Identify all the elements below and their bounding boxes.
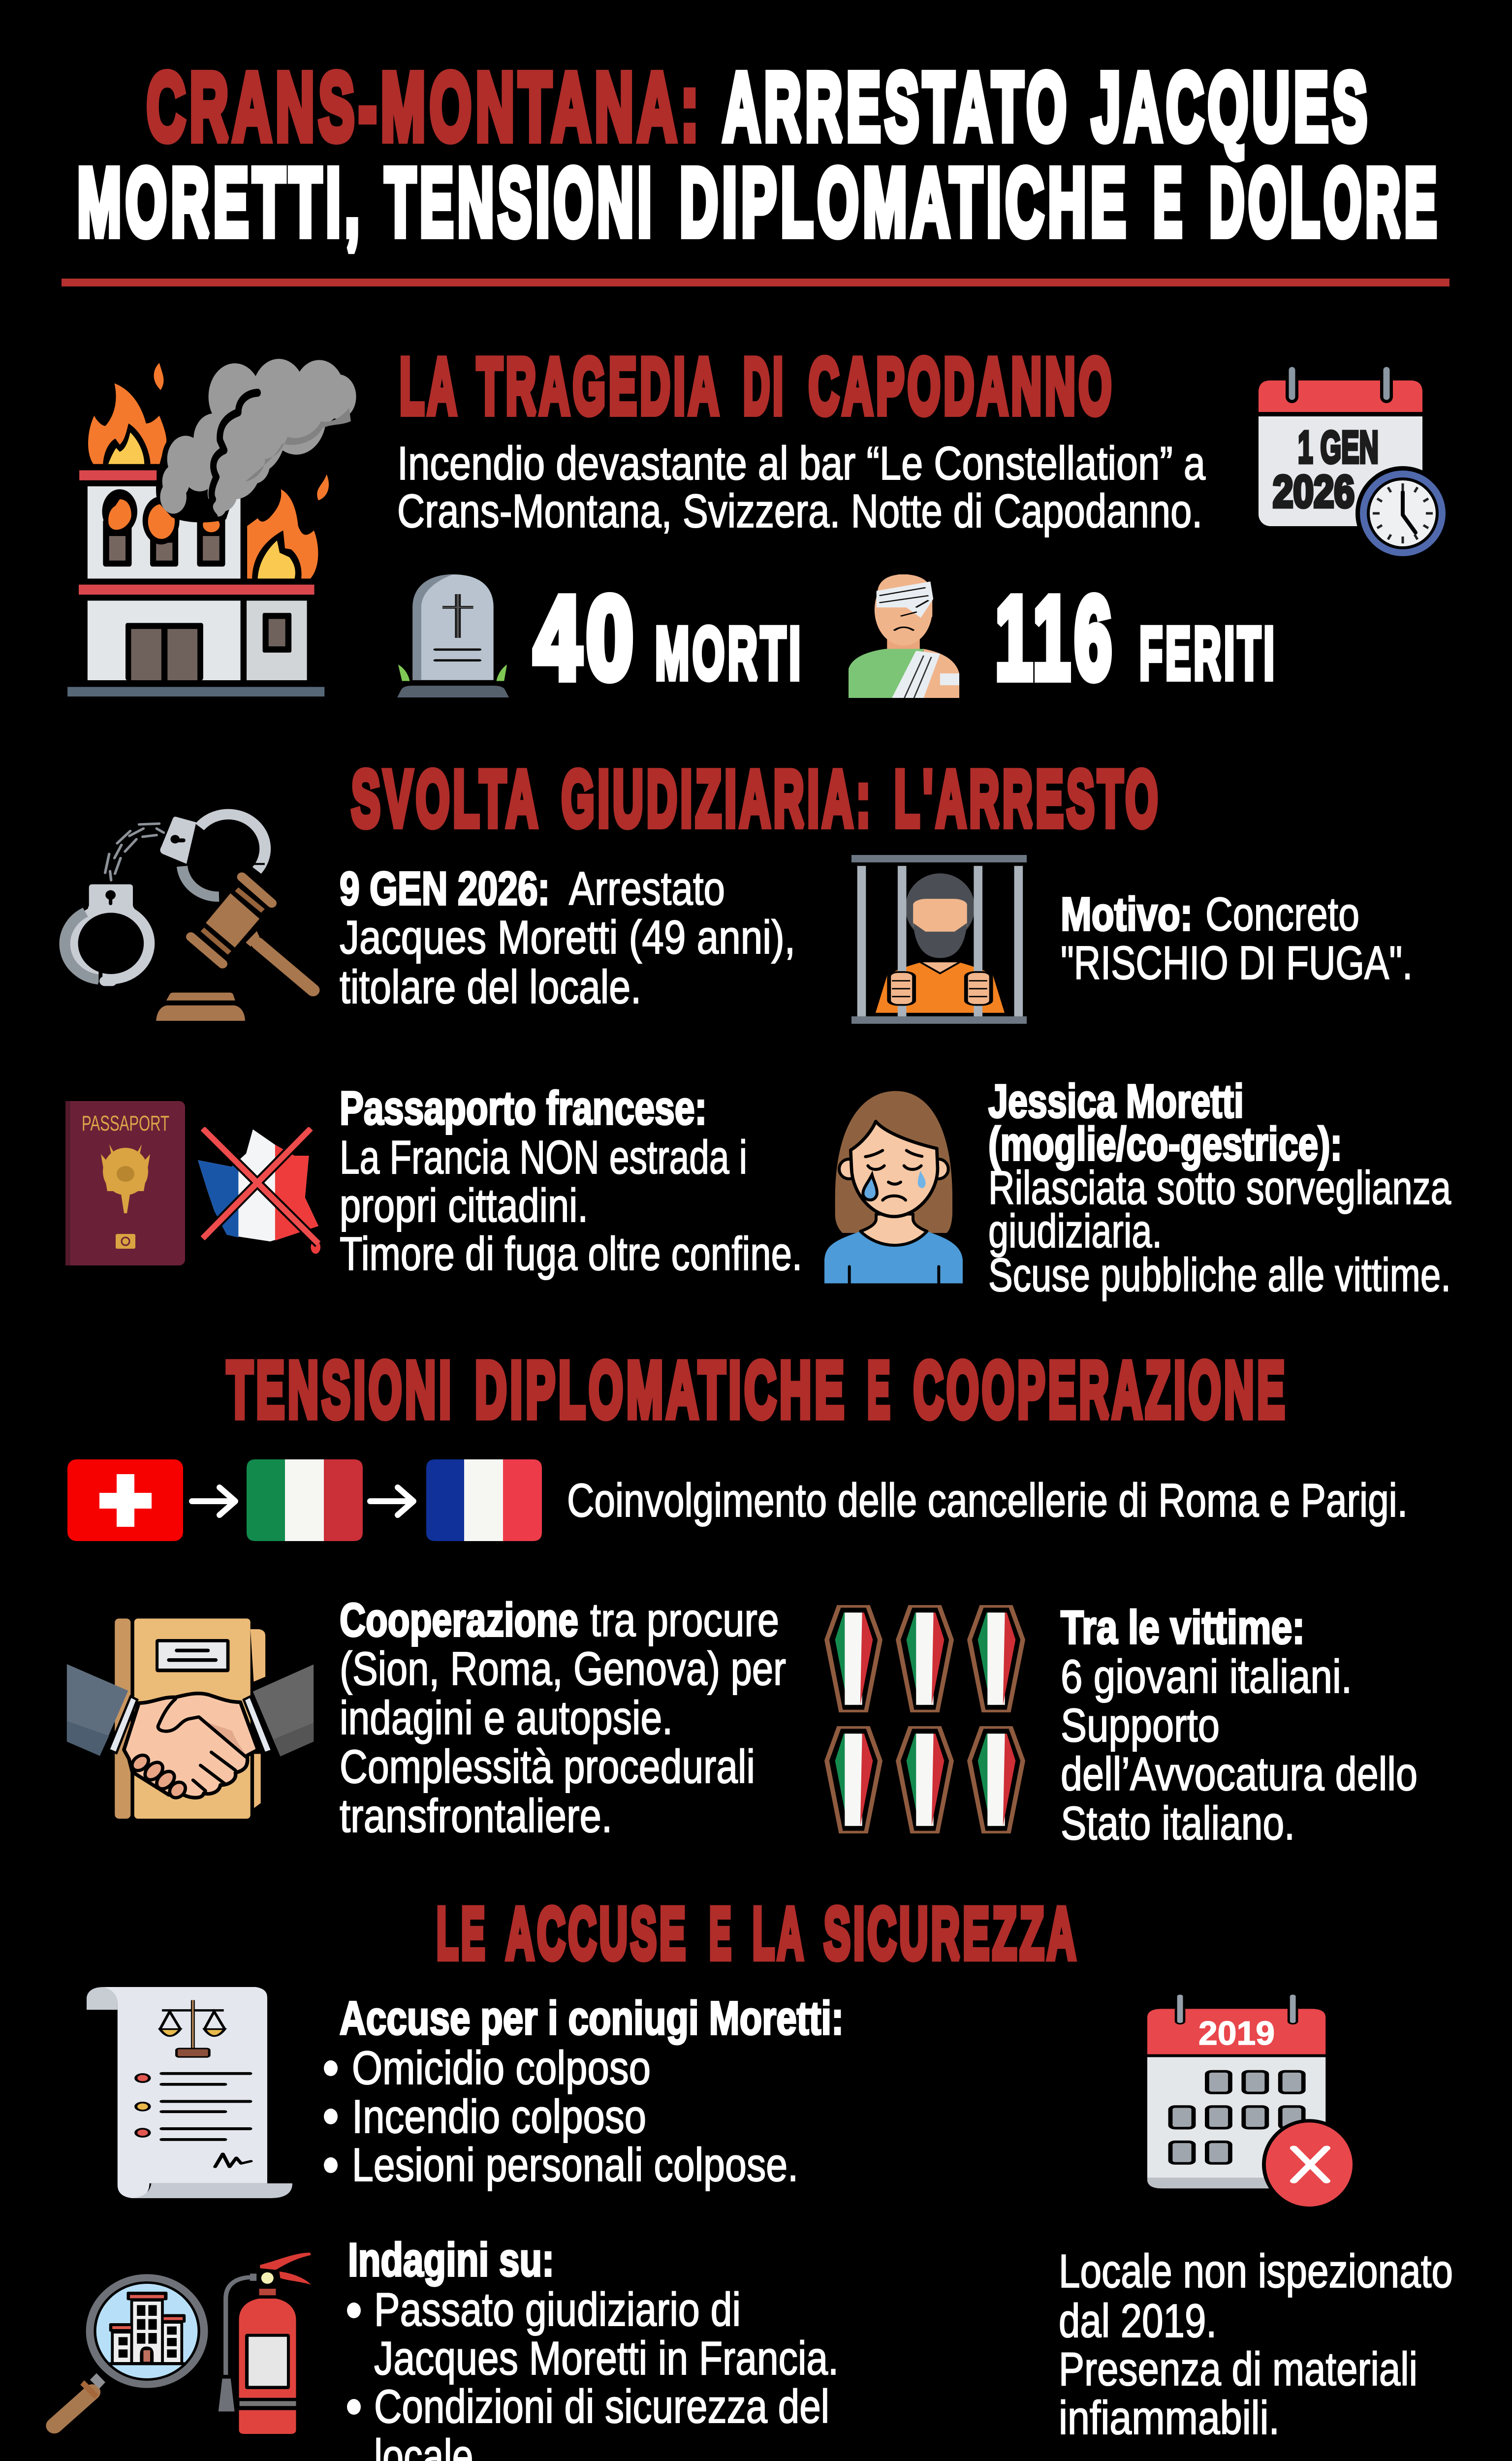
text block: tra le vittime: dell’Avvocatura dello [1061, 1748, 1418, 1800]
text block: arresto: Jacques Moretti (49 anni), [340, 911, 795, 964]
panel: tensioni diplomatiche [67, 1346, 1418, 1850]
text block: locale non ispezionato: dal 2019. [1059, 2295, 1217, 2347]
text block: accuse: Incendio colposo [352, 2090, 646, 2143]
text block: indagini [347, 2234, 839, 2461]
text block: accuse: Lesioni personali colpose. [352, 2139, 798, 2191]
text block: indagini: Jacques Moretti in Francia. [374, 2332, 839, 2385]
text block: cooperazione: indagini e autopsie. [340, 1692, 673, 1744]
text block: jessica moretti: giudiziaria. [988, 1205, 1162, 1258]
title: TENSIONI [385, 149, 656, 256]
text block: indagini: Indagini su: [348, 2234, 554, 2286]
icon: six coffins with italian flag [824, 1605, 1025, 1833]
title: MORETTI, [77, 149, 364, 256]
icon: injured person [849, 574, 959, 698]
icon: handshake over folder [67, 1618, 314, 1819]
text block: passaporto francese [340, 1082, 802, 1280]
icon: fire extinguisher [219, 2252, 311, 2434]
heading: CAPODANNO [809, 342, 1115, 431]
text block: tra le vittime [1061, 1601, 1418, 1850]
text block: cooperazione: transfrontaliere. [340, 1790, 612, 1842]
heading: E [867, 1346, 893, 1434]
title: E [1153, 149, 1186, 256]
heading [437, 1893, 1079, 1974]
heading: SICUREZZA [824, 1893, 1079, 1974]
text block: cooperazione: Cooperazione [340, 1594, 578, 1646]
icon: swiss flag [67, 1459, 183, 1541]
icon: crossed out france map [198, 1127, 321, 1254]
text block: locale non ispezionato: infiammabili. [1059, 2392, 1280, 2444]
text block: accuse [324, 1992, 844, 2191]
heading: GIUDIZIARIA: [562, 755, 874, 843]
icon: man in jail [851, 855, 1027, 1024]
stat: 40 morti: MORTI [655, 612, 804, 694]
heading: DIPLOMATICHE [475, 1346, 848, 1434]
panel: la tragedia di capodanno [67, 342, 1450, 703]
title [77, 53, 1441, 256]
heading [400, 342, 1115, 431]
text block: arresto: 9 GEN 2026: [340, 862, 550, 915]
text block: cooperazione: (Sion, Roma, Genova) per [340, 1642, 786, 1695]
stat: 40 morti [534, 573, 804, 703]
heading: DI [743, 342, 786, 431]
text block: incendio [397, 437, 1206, 537]
heading [227, 1346, 1288, 1434]
heading: LA [753, 1893, 806, 1974]
text block: incendio: Crans-Montana, Svizzera. Notte di Capodanno. [397, 485, 1202, 537]
title: CRANS-MONTANA: [147, 53, 703, 160]
text block: arresto: titolare del locale. [340, 961, 641, 1013]
icon: calendar 2019 with red x: 2019 [1198, 2015, 1275, 2052]
stat: 116 feriti: 116 [995, 573, 1116, 703]
heading: E [709, 1893, 734, 1974]
text block: cooperazione [340, 1594, 786, 1842]
text block: passaporto francese: Passaporto francese: [340, 1082, 707, 1135]
icon: french flag [426, 1459, 542, 1541]
text block: tra le vittime: Supporto [1061, 1699, 1220, 1752]
arrow [192, 1487, 235, 1515]
heading: SVOLTA [351, 755, 541, 843]
heading: TRAGEDIA [477, 342, 722, 431]
heading: L'ARRESTO [894, 755, 1161, 843]
stat: 116 feriti: FERITI [1139, 612, 1277, 694]
text block: motivo: Concreto [1205, 888, 1359, 941]
text block: indagini: Passato giudiziario di [374, 2283, 741, 2336]
heading: LE [437, 1893, 488, 1974]
icon: italian flag [247, 1459, 363, 1541]
heading: ACCUSE [506, 1893, 689, 1974]
text block: cooperazione: Complessità procedurali [340, 1740, 755, 1793]
text block: jessica moretti: Jessica Moretti [988, 1075, 1244, 1128]
title: DIPLOMATICHE [680, 149, 1130, 256]
text block: tra le vittime: Tra le vittime: [1061, 1601, 1305, 1654]
text block: tra le vittime: Stato italiano. [1061, 1797, 1295, 1850]
icon: legal scroll [87, 1987, 292, 2198]
arrow [370, 1487, 413, 1515]
icon: calendar 2019 with red x [1147, 1996, 1356, 2210]
icon: french passport: PASSAPORT [82, 1111, 169, 1136]
panel: svolta giudiziaria [65, 755, 1451, 1301]
text block: accuse: Omicidio colposo [352, 2042, 651, 2094]
icon: magnifier over building [46, 2274, 208, 2433]
text block: accuse: Accuse per i coniugi Moretti: [340, 1992, 844, 2045]
text block: motivo: "RISCHIO DI FUGA". [1061, 937, 1413, 989]
text block: passaporto francese: Timore di fuga oltre confine. [340, 1228, 802, 1280]
icon: tombstone [397, 574, 509, 697]
text block: jessica moretti [988, 1075, 1451, 1301]
panel: le accuse e la sicurezza [54, 1893, 1453, 2461]
text block: passaporto francese: propri cittadini. [340, 1179, 588, 1232]
text block: motivo [1061, 888, 1413, 989]
text block: motivo: Motivo: [1061, 888, 1193, 941]
text block: tra le vittime: 6 giovani italiani. [1061, 1650, 1352, 1703]
text block: passaporto francese: La Francia NON estrada i [340, 1131, 747, 1184]
text block: incendio: Incendio devastante al bar “Le Constellation” a [397, 437, 1206, 490]
icon: calendar 1 gen 2026 with clock [1259, 370, 1450, 561]
icon: burning building [67, 359, 356, 697]
icon: crying woman [824, 1091, 963, 1284]
text block: locale non ispezionato [1059, 2245, 1453, 2444]
text block: indagini: Condizioni di sicurezza del [374, 2380, 829, 2433]
text block: jessica moretti: (moglie/co-gestrice): [988, 1118, 1342, 1170]
text block: locale non ispezionato: Presenza di materiali [1059, 2343, 1418, 2396]
text block: arresto: Arrestato [569, 862, 725, 915]
stat: 40 morti: 40 [534, 573, 638, 703]
title: ARRESTATO [723, 53, 1071, 160]
icon: calendar 1 gen 2026 with clock: 1 GEN [1298, 422, 1379, 473]
heading: LA [400, 342, 460, 431]
text block: arresto [340, 862, 795, 1013]
text block: cooperazione: tra procure [590, 1594, 779, 1646]
icon: handcuffs and gavel [59, 809, 320, 1021]
heading: TENSIONI [227, 1346, 454, 1434]
icon: french passport [65, 1101, 185, 1265]
icon: calendar 1 gen 2026 with clock: 2026 [1273, 467, 1354, 517]
